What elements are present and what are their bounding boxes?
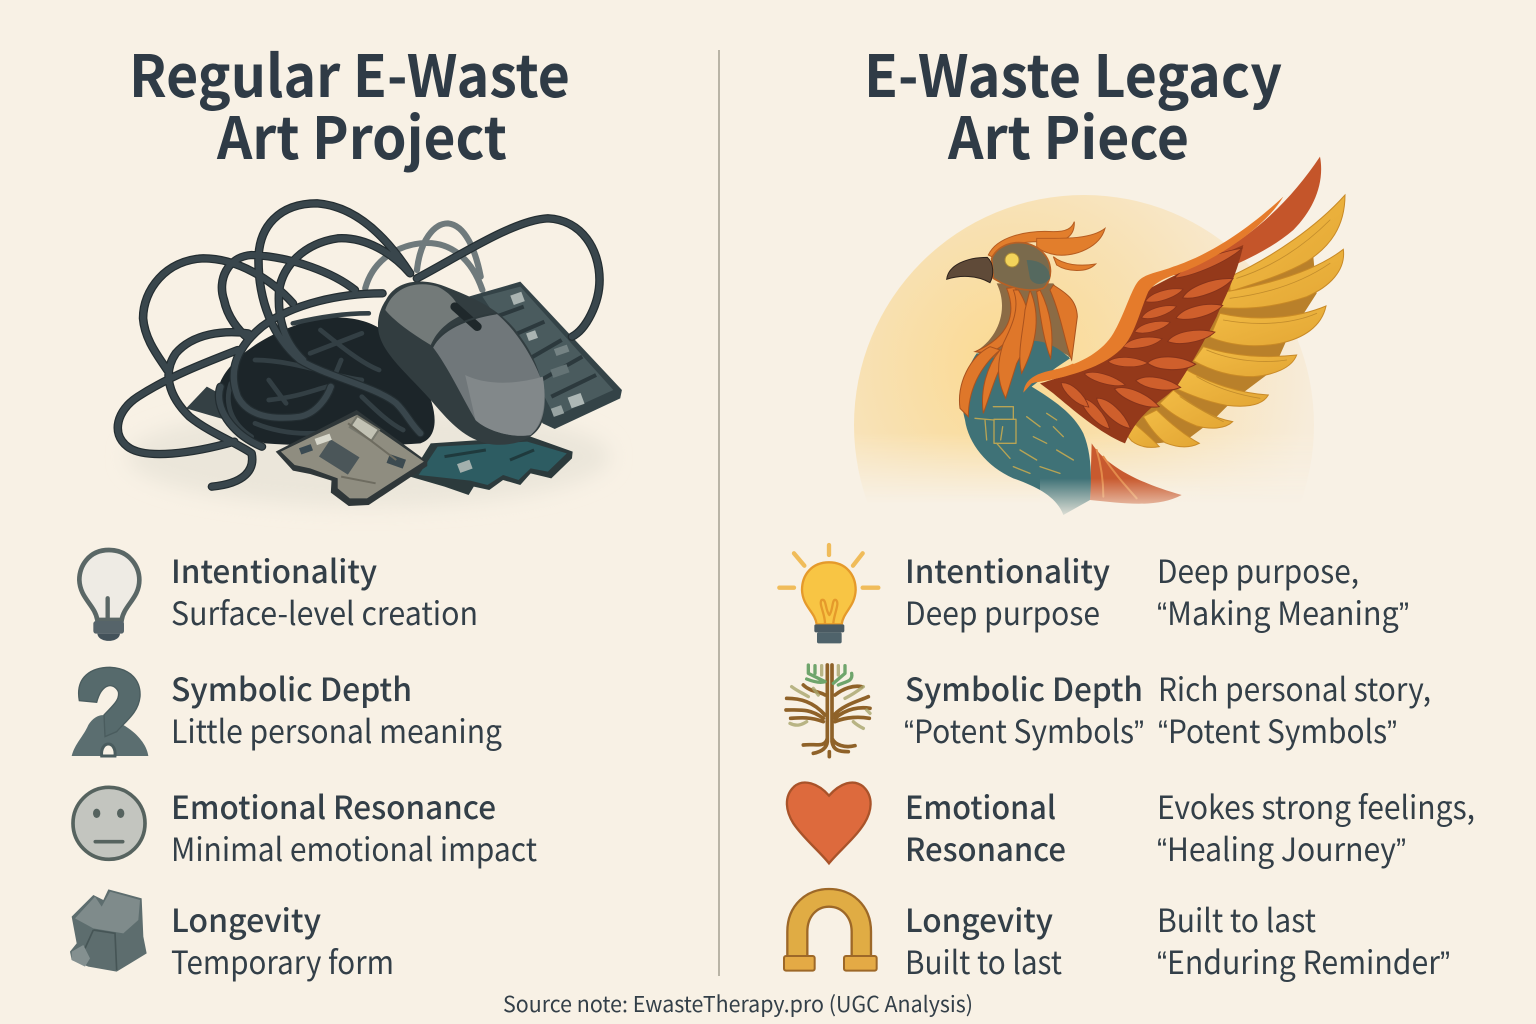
bottom fade bbox=[1040, 478, 1200, 522]
text: Resonance bbox=[905, 825, 1066, 871]
text: Rich personal story, bbox=[1158, 665, 1431, 711]
panel: regular e-waste art project bbox=[70, 30, 622, 984]
icon: crumbling stone block bbox=[70, 889, 147, 972]
text bbox=[905, 783, 1475, 871]
heading: e-waste legacy art piece: E-Waste Legacy bbox=[864, 30, 1282, 114]
glow bbox=[854, 195, 1314, 494]
icon: question mark bbox=[72, 667, 148, 756]
orange wing arm bbox=[1023, 197, 1283, 393]
text: “Making Meaning” bbox=[1157, 589, 1409, 635]
text bbox=[905, 547, 1409, 635]
front circuit board bbox=[276, 410, 427, 506]
text: Longevity bbox=[905, 896, 1053, 942]
text: “Potent Symbols” bbox=[904, 707, 1144, 753]
text: Built to last bbox=[905, 938, 1062, 984]
row: symbolic depth bbox=[786, 665, 1431, 757]
mass strands bbox=[228, 313, 403, 437]
text: Deep purpose, bbox=[1157, 547, 1359, 593]
text bbox=[904, 665, 1431, 753]
row: emotional resonance bbox=[73, 783, 537, 871]
row: symbolic depth bbox=[72, 665, 502, 756]
row: longevity bbox=[784, 889, 1450, 984]
loose cables bbox=[118, 203, 600, 487]
text: Intentionality bbox=[905, 547, 1110, 593]
gray back cable bbox=[365, 223, 482, 290]
row: longevity bbox=[70, 889, 394, 984]
row: emotional resonance bbox=[787, 783, 1475, 871]
head bbox=[992, 243, 1050, 290]
text: Emotional bbox=[905, 783, 1056, 829]
text: Temporary form bbox=[171, 938, 394, 984]
icon: horseshoe arch bbox=[784, 889, 877, 971]
circuit patterns bbox=[975, 407, 1073, 473]
yellow feather shadow bbox=[1123, 257, 1317, 443]
heading: regular e-waste art project bbox=[129, 30, 570, 176]
eye bbox=[1005, 253, 1019, 267]
text: “Enduring Reminder” bbox=[1157, 938, 1450, 984]
illustration: tangled cables, mouse and circuit boards bbox=[118, 203, 622, 507]
text: Symbolic Depth bbox=[905, 665, 1143, 711]
text bbox=[171, 783, 537, 871]
row: intentionality bbox=[79, 547, 478, 641]
panel: e-waste legacy art piece bbox=[779, 30, 1475, 984]
crest bbox=[988, 222, 1105, 271]
text: Symbolic Depth bbox=[171, 665, 412, 711]
text: “Healing Journey” bbox=[1157, 825, 1406, 871]
beak bbox=[947, 257, 993, 283]
red wing base bbox=[1040, 245, 1243, 443]
divider bbox=[718, 50, 720, 976]
text: Built to last bbox=[1157, 896, 1316, 942]
neck bbox=[975, 283, 1077, 367]
icon: neutral face bbox=[73, 787, 145, 859]
text: Emotional Resonance bbox=[171, 783, 496, 829]
tail bbox=[1090, 443, 1182, 504]
heading: regular e-waste art project: Regular E-Waste bbox=[129, 30, 570, 114]
text bbox=[171, 896, 394, 984]
icon: circuit tree bbox=[786, 665, 870, 757]
wing feathers bbox=[1058, 245, 1244, 433]
dark cable mass bbox=[217, 317, 435, 446]
illustration: phoenix with circuit body bbox=[854, 156, 1346, 515]
heading: e-waste legacy art piece bbox=[864, 30, 1282, 176]
left back board bbox=[186, 387, 238, 423]
text: Little personal meaning bbox=[171, 707, 502, 753]
teal circuit board bbox=[410, 437, 573, 495]
text: Deep purpose bbox=[905, 589, 1100, 635]
text bbox=[171, 547, 478, 635]
text: Intentionality bbox=[171, 547, 377, 593]
computer mouse bbox=[378, 281, 545, 445]
icon: heart bbox=[787, 783, 871, 863]
feather lines bbox=[1180, 220, 1330, 422]
heading: regular e-waste art project: Art Project bbox=[216, 92, 507, 176]
text: Evokes strong feelings, bbox=[1157, 783, 1475, 829]
neck feathers bbox=[959, 285, 1077, 417]
row: intentionality bbox=[779, 545, 1409, 643]
text bbox=[171, 665, 502, 753]
text: “Potent Symbols” bbox=[1158, 707, 1397, 753]
text bbox=[905, 896, 1450, 984]
icon: glowing light bulb bbox=[779, 545, 878, 643]
heading: e-waste legacy art piece: Art Piece bbox=[947, 92, 1189, 176]
body bbox=[962, 353, 1091, 515]
source note: Source note: EwasteTherapy.pro (UGC Analysis) bbox=[503, 987, 973, 1019]
keyboard board bbox=[469, 282, 622, 429]
wing arm root over body bbox=[1023, 363, 1073, 393]
icon: dim light bulb bbox=[79, 550, 139, 641]
upper red primary feather bbox=[1173, 157, 1321, 277]
text: Surface-level creation bbox=[171, 589, 478, 635]
text: Minimal emotional impact bbox=[171, 825, 537, 871]
yellow feathers bbox=[1120, 195, 1345, 447]
text: Longevity bbox=[171, 896, 321, 942]
